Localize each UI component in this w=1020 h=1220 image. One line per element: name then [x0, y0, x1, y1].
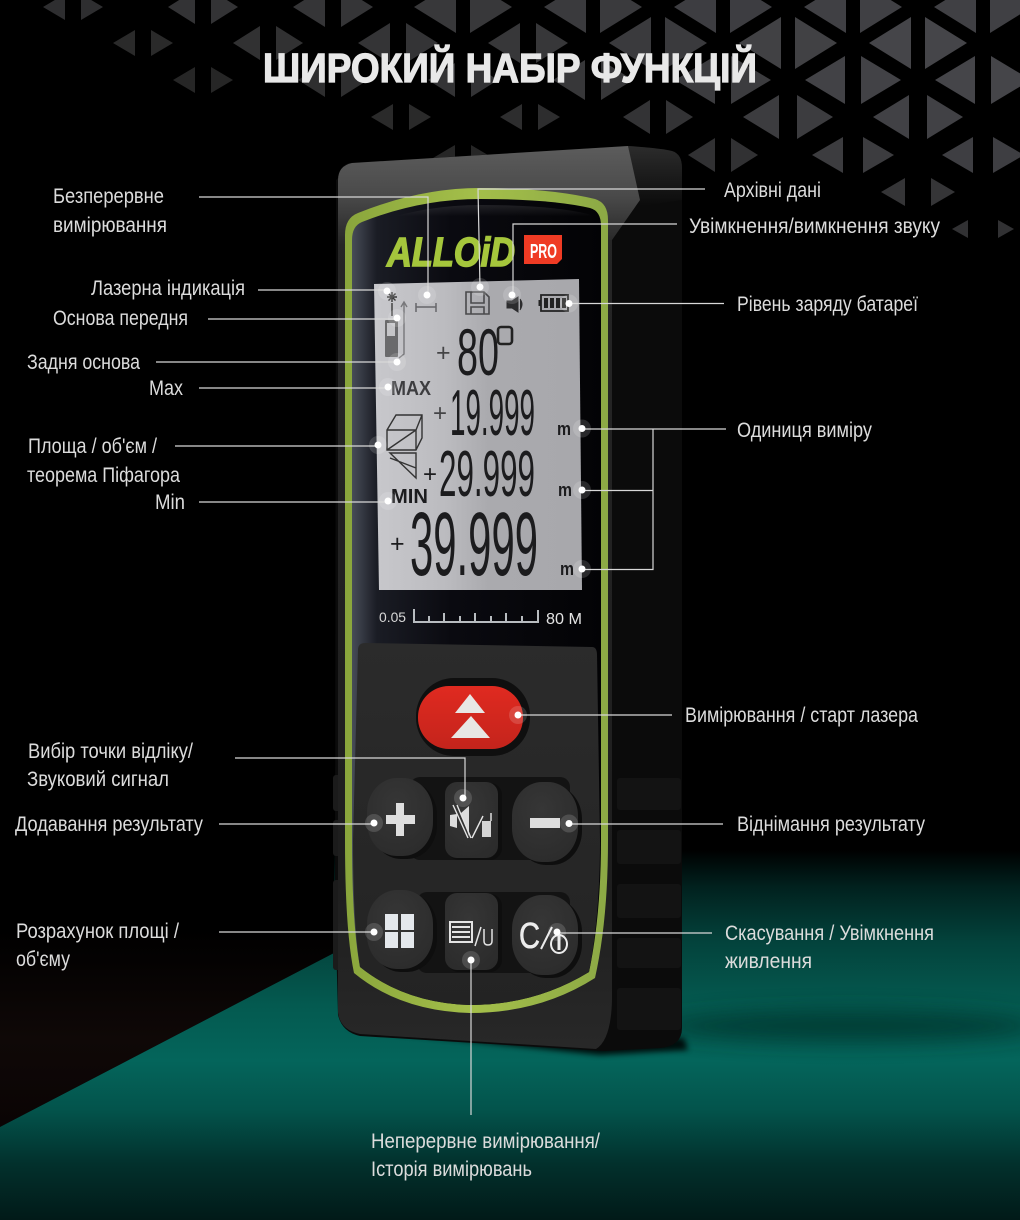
button: reference and sound — [445, 782, 502, 860]
callout: measure and laser start — [509, 704, 918, 727]
logo: ALLOiD: ALLOiD — [386, 229, 515, 275]
lcd: first plus: + — [433, 400, 447, 427]
lcd: third plus: + — [390, 530, 405, 558]
callout: add result — [15, 813, 383, 836]
callout: archive: Архівні дані — [724, 179, 821, 202]
keypad panel — [353, 643, 600, 1005]
floor shadow — [660, 1010, 1020, 1042]
front face — [338, 200, 612, 1049]
icon: battery — [538, 295, 568, 311]
callout: area calculation: Розрахунок площі / — [16, 920, 179, 943]
callout: max: Max — [149, 377, 183, 400]
callout: cancel and power: живлення — [725, 950, 812, 973]
callout: continuous measurement and history — [371, 951, 600, 1181]
callout: sound on off — [503, 215, 940, 304]
device shadow — [345, 1028, 688, 1055]
callout: continuous measurement: Безперервне — [53, 185, 164, 208]
button: cancel and power: C — [519, 915, 540, 956]
icon: speaker — [507, 297, 522, 312]
icon: device reference — [385, 302, 407, 358]
lcd: second unit: m — [558, 480, 572, 500]
callout: min: Min — [155, 491, 185, 514]
title: ШИРОКИЙ НАБІР ФУНКЦІЙ — [263, 45, 757, 91]
callout: area volume pythagoras: Площа / об'єм / — [28, 435, 157, 458]
lcd display: 29.999 — [439, 437, 535, 510]
background: triangle pattern — [43, 0, 1020, 238]
badge: PRO — [524, 235, 562, 264]
lcd: degree mark — [498, 327, 512, 344]
callout: unit of measure: Одиниця виміру — [737, 419, 872, 442]
lcd: second plus: + — [423, 461, 437, 488]
callout: continuous measurement and history: Неперервне вимірювання/ — [371, 1130, 600, 1153]
button: plus — [367, 778, 437, 859]
callouts: left — [15, 185, 472, 971]
icon: save — [466, 292, 489, 314]
lcd: angle plus: + — [436, 339, 451, 367]
callout: laser indication: Лазерна індикація — [91, 277, 245, 300]
icon: laser — [387, 292, 397, 316]
device: laser distance meter — [333, 146, 688, 1055]
range ruler — [414, 609, 538, 622]
keypad row one — [367, 777, 582, 865]
callout: continuous measurement: вимірювання — [53, 214, 167, 237]
background: teal floor — [0, 850, 1020, 1220]
lcd: angle value: 80 — [457, 315, 499, 389]
callout: archive — [471, 179, 821, 296]
side ribs — [617, 778, 681, 1030]
lcd display: 39.999 — [410, 495, 538, 595]
lcd: MIN: MIN — [391, 486, 428, 508]
callout: rear base: Задня основа — [27, 351, 140, 374]
callout: max — [149, 377, 397, 400]
callout: unit of measure — [573, 419, 872, 578]
side top cap — [628, 146, 682, 206]
callout: area volume pythagoras: теорема Піфагора — [27, 464, 180, 487]
screen glass — [352, 199, 601, 1005]
callout: subtract result: Віднімання результату — [737, 813, 925, 836]
badge: PRO: PRO — [530, 241, 557, 263]
callouts: right — [471, 179, 940, 973]
callout: sound on off: Увімкнення/вимкнення звуку — [689, 215, 940, 238]
callout: reference point and sound — [27, 740, 472, 807]
callout: reference point and sound: Вибір точки відліку/ — [28, 740, 193, 763]
lcd display — [374, 279, 582, 595]
icon: continuous measure — [416, 303, 436, 312]
callout: cancel and power: Скасування / Увімкнення — [725, 922, 934, 945]
callout: subtract result — [560, 813, 925, 836]
lcd: first unit: m — [557, 419, 571, 439]
lcd: MAX: MAX — [391, 378, 432, 400]
callout: area calculation — [16, 920, 383, 971]
button: history — [445, 893, 502, 972]
button: cancel and power — [512, 895, 582, 978]
callout: front base: Основа передня — [53, 307, 188, 330]
callout: measure and laser start: Вимірювання / старт лазера — [685, 704, 918, 727]
lcd: third unit: m — [560, 559, 574, 579]
keypad row two — [367, 890, 582, 978]
lcd background — [374, 279, 582, 590]
range label: 80 M: 80 M — [546, 611, 582, 628]
range label: 0.05: 0.05 — [379, 610, 406, 625]
callout: continuous measurement and history: Історія вимірювань — [371, 1158, 532, 1181]
callout: battery level — [560, 293, 918, 316]
callout: cancel and power — [548, 922, 934, 973]
callout: add result: Додавання результату — [15, 813, 203, 836]
icon: area and volume — [387, 415, 422, 478]
button: area — [367, 890, 437, 972]
button: minus — [512, 782, 582, 865]
top cap — [338, 146, 640, 245]
callout: area calculation: об'єму — [16, 948, 70, 971]
left grips — [333, 775, 345, 970]
callout: min — [155, 491, 397, 514]
background: brown wedge — [0, 930, 334, 1127]
callout: laser indication — [91, 277, 396, 300]
callout: continuous measurement — [53, 185, 436, 304]
callout: front base — [53, 307, 406, 330]
callout: area volume pythagoras — [27, 435, 387, 487]
lcd display: 19.999 — [450, 376, 535, 449]
callout: rear base — [27, 351, 406, 374]
glass reflection — [356, 205, 597, 300]
callout: reference point and sound: Звуковий сигнал — [27, 768, 169, 791]
button: measure — [416, 678, 530, 756]
green bezel — [345, 188, 608, 1013]
callout: battery level: Рівень заряду батареї — [737, 293, 918, 316]
device body — [335, 146, 682, 1051]
